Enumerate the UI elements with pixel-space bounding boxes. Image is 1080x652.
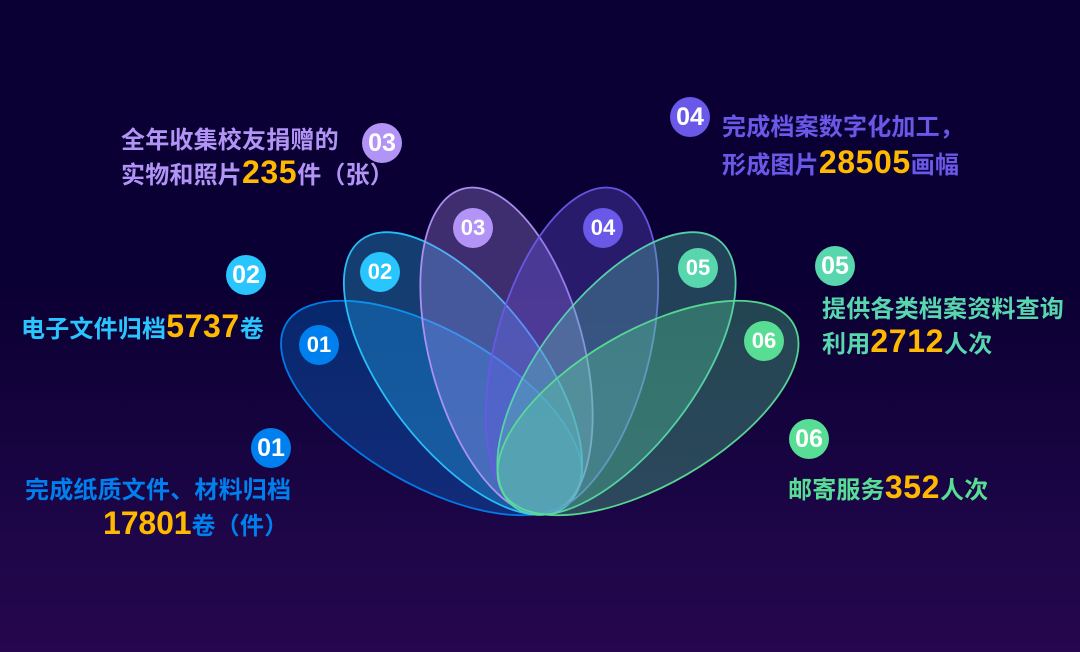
- badge 02: [226, 255, 266, 295]
- petal 05: [453, 193, 780, 554]
- text 05 line 1: 提供各类档案资料查询: [822, 296, 1064, 323]
- petal 03: [389, 169, 624, 533]
- text 04 line 2: 形成图片28505画幅: [722, 144, 959, 180]
- badge 05: [815, 246, 855, 286]
- petal badge 06: [744, 321, 784, 361]
- petal badge 04: [583, 208, 623, 248]
- petal 02: [300, 193, 626, 554]
- badge 06: 06: [795, 425, 823, 453]
- text 01 line 2: 17801卷（件）: [103, 505, 288, 541]
- badge 06: [789, 419, 829, 459]
- petal badge 01: 01: [307, 332, 331, 357]
- badge 03: 03: [368, 129, 396, 157]
- text 05 line 2: 利用2712人次: [822, 323, 992, 359]
- badge 04: [670, 97, 710, 137]
- petal badge 03: [453, 208, 493, 248]
- badge 04: 04: [676, 103, 704, 131]
- petal badge 04: 04: [591, 215, 615, 240]
- text 01 line 1: 完成纸质文件、材料归档: [25, 477, 291, 504]
- text 02: 电子文件归档5737卷: [21, 308, 264, 344]
- petal badge 02: 02: [368, 259, 392, 284]
- petal badge 02: [360, 252, 400, 292]
- text 03 line 1: 全年收集校友捐赠的: [121, 127, 339, 154]
- petal badge 05: [678, 248, 718, 288]
- petal 01: [248, 257, 615, 559]
- text 06: 邮寄服务352人次: [788, 469, 988, 505]
- badge 01: [251, 428, 291, 468]
- petal badge 03: 03: [461, 215, 485, 240]
- petal badge 05: 05: [686, 255, 710, 280]
- text 04 line 1: 完成档案数字化加工，: [722, 114, 964, 141]
- petal badge 06: 06: [752, 328, 776, 353]
- badge 02: 02: [232, 261, 260, 289]
- petal 04: [454, 169, 690, 533]
- petal badge 01: [299, 325, 339, 365]
- badge 05: 05: [821, 252, 849, 280]
- badge 03: [362, 123, 402, 163]
- text 03 line 2: 实物和照片235件（张）: [121, 154, 394, 190]
- petal 06: [464, 257, 832, 559]
- badge 01: 01: [257, 434, 285, 462]
